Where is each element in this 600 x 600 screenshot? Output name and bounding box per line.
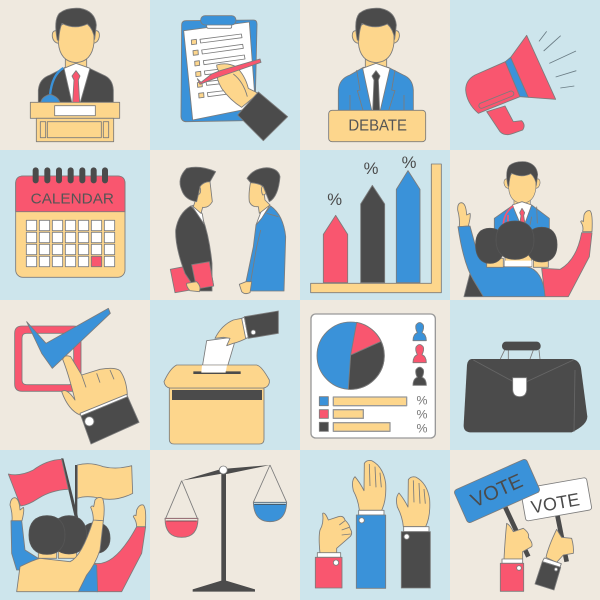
panel: calendar [16, 167, 125, 277]
percent legend text: % [417, 394, 428, 408]
panel: debate candidate [329, 8, 426, 142]
panel: briefcase [464, 342, 587, 432]
panel: vote placards [453, 458, 592, 591]
calendar label: CALENDAR [31, 192, 114, 208]
left holding hand [500, 523, 532, 591]
panels row two [16, 153, 592, 297]
panel: raised hands [315, 460, 430, 588]
percent labels: % [327, 190, 342, 209]
panel: two men talking [170, 167, 286, 294]
white sign label: VOTE [529, 489, 581, 517]
panel: speaker at podium [30, 8, 120, 142]
panels row one [30, 8, 576, 142]
panel: balance scales [165, 465, 287, 592]
crowd heads [476, 221, 557, 263]
percent labels: % [402, 153, 417, 172]
percent legend text: % [417, 408, 428, 422]
hand with dark sleeve [396, 477, 430, 588]
panels row three [15, 308, 587, 444]
percent labels [327, 153, 417, 209]
percent legend text: % [417, 422, 428, 436]
legend bars [319, 397, 407, 431]
percent legend text [417, 394, 428, 436]
panel: megaphone [466, 31, 576, 135]
panel: clipboard checklist [181, 16, 288, 141]
percent labels: % [364, 159, 379, 178]
panel: tick box and pointing hand [15, 308, 139, 444]
crowd heads [29, 516, 110, 558]
hand with blue sleeve [352, 460, 386, 588]
right holding hand [535, 529, 573, 590]
panel: speaker and crowd [458, 162, 592, 297]
panel: flag-waving crowd [8, 458, 146, 592]
debate label: DEBATE [348, 118, 407, 135]
panels row four [8, 458, 592, 592]
panel: rising percent chart [311, 153, 441, 293]
hand with red sleeve [315, 513, 352, 588]
blue sign label: VOTE [468, 470, 526, 512]
person icons [413, 322, 426, 385]
panel: poll results card [311, 314, 435, 438]
pie chart [317, 322, 384, 389]
panel: ballot box [164, 311, 278, 444]
